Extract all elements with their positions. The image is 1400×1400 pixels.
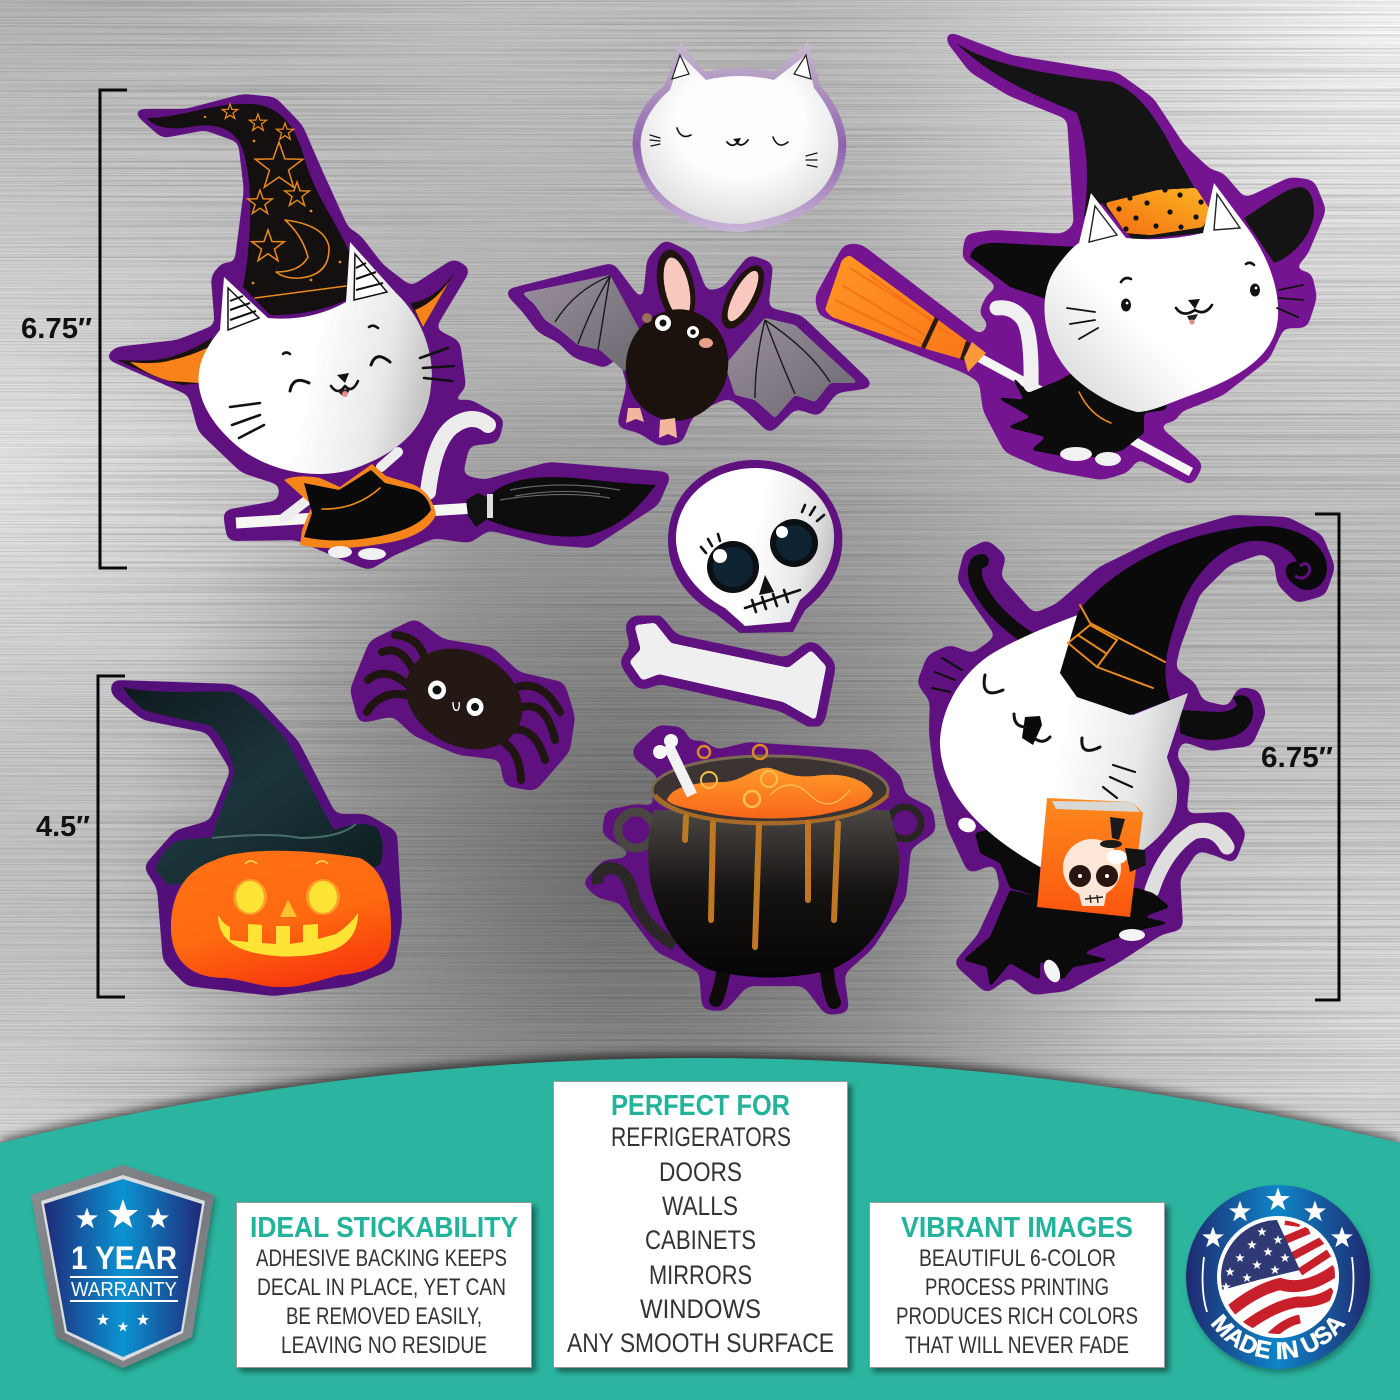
sticker: pumpkin with witch hat xyxy=(114,683,399,993)
teal footer panel xyxy=(0,1053,1400,1400)
info card: perfect for: ANY SMOOTH SURFACE xyxy=(567,1328,834,1358)
spider body xyxy=(388,629,540,769)
dimension bracket: right cat xyxy=(1315,514,1339,1000)
dress xyxy=(996,370,1168,457)
hat brims xyxy=(970,187,1314,300)
dimension label 4.5: 4.5″ xyxy=(36,811,90,843)
ears xyxy=(1089,194,1240,242)
cat head xyxy=(940,615,1188,867)
badge text: MADE IN USA xyxy=(1210,1314,1346,1360)
tail xyxy=(428,419,488,492)
bat wings xyxy=(522,275,858,418)
smiling face xyxy=(1067,263,1303,339)
info card: perfect for: WALLS xyxy=(662,1191,738,1221)
dress and arms xyxy=(284,452,436,560)
cat head xyxy=(1044,183,1278,412)
cauldron handles and tail xyxy=(598,807,921,945)
warranty text: WARRANTY xyxy=(71,1279,177,1301)
info card: vibrant images: THAT WILL NEVER FADE xyxy=(905,1332,1129,1359)
info card: ideal stickability: IDEAL STICKABILITY xyxy=(250,1212,518,1244)
sticker: skull xyxy=(668,460,842,633)
cauldron rim xyxy=(652,756,888,824)
skull face xyxy=(701,505,824,612)
sticker: sleeping moon cat face xyxy=(633,42,846,232)
ears xyxy=(228,254,387,330)
info card: perfect for: REFRIGERATORS xyxy=(611,1122,791,1152)
bat body and face xyxy=(615,300,739,438)
jack-o-lantern face xyxy=(218,861,358,957)
sticker: cauldron xyxy=(586,728,933,1012)
bubbling details xyxy=(698,745,850,807)
info card: vibrant images: BEAUTIFUL 6-COLOR xyxy=(919,1245,1116,1272)
info card: vibrant images: PRODUCES RICH COLORS xyxy=(896,1303,1138,1330)
sticker: witch cat reading skull book xyxy=(920,518,1332,992)
dimension bracket: pumpkin xyxy=(98,676,125,997)
sticker: witch cat with polka-dot hat on orange broom xyxy=(818,35,1323,482)
info card: perfect for: WINDOWS xyxy=(640,1294,761,1324)
witch hat with belt xyxy=(1060,526,1327,715)
teal hat xyxy=(123,687,383,885)
info card: ideal stickability: ADHESIVE BACKING KEEPS xyxy=(256,1245,507,1272)
info card: ideal stickability: DECAL IN PLACE, YET CAN xyxy=(257,1274,506,1301)
info card: perfect for: DOORS xyxy=(659,1157,742,1187)
tail xyxy=(997,308,1031,385)
warranty text: 1 YEAR xyxy=(71,1240,177,1276)
warranty text xyxy=(70,1240,178,1302)
spider face xyxy=(428,680,484,716)
pumpkin body xyxy=(171,851,391,987)
info card: vibrant images: VIBRANT IMAGES xyxy=(901,1212,1133,1244)
sleeve and skirt xyxy=(956,815,1170,987)
broom xyxy=(236,477,656,537)
info card: perfect for: CABINETS xyxy=(645,1225,756,1255)
dimension label 6.75 left: 6.75″ xyxy=(21,313,92,345)
sticker: bone xyxy=(632,625,824,717)
bat ears xyxy=(650,246,773,335)
cauldron legs xyxy=(716,965,834,1002)
dimension bracket: top-left cat xyxy=(100,90,127,568)
sticker: bat xyxy=(508,243,870,443)
info card: perfect for: PERFECT FOR xyxy=(611,1090,790,1122)
hat xyxy=(956,43,1210,240)
hat brim curls xyxy=(975,561,1253,740)
info card: perfect for xyxy=(554,1082,852,1372)
info card: ideal stickability xyxy=(236,1202,536,1372)
badge stars xyxy=(1202,1188,1353,1247)
broom xyxy=(825,255,1191,472)
warranty shield badge xyxy=(31,1165,216,1372)
cat head xyxy=(198,242,432,474)
skull book xyxy=(1037,798,1146,917)
info card: vibrant images: PROCESS PRINTING xyxy=(925,1274,1109,1301)
happy face xyxy=(230,326,454,438)
tail xyxy=(1152,830,1227,890)
dimension label 6.75 right: 6.75″ xyxy=(1261,742,1333,774)
sticker: witch cat with starry hat on black broom xyxy=(109,97,668,567)
info card: ideal stickability: LEAVING NO RESIDUE xyxy=(281,1332,487,1359)
sleeping face xyxy=(932,658,1135,798)
sticker: spider xyxy=(353,622,572,788)
info card: perfect for: MIRRORS xyxy=(649,1260,752,1290)
orange drips xyxy=(685,817,838,947)
feet xyxy=(1060,392,1121,466)
warranty stars xyxy=(76,1199,169,1331)
bone in cauldron xyxy=(653,734,692,795)
info card: vibrant images xyxy=(870,1202,1169,1372)
flag xyxy=(1221,1220,1335,1334)
moon cat face xyxy=(650,128,817,167)
info card: ideal stickability: BE REMOVED EASILY, xyxy=(286,1303,482,1330)
cauldron body xyxy=(648,810,899,978)
starry hat xyxy=(147,104,350,315)
made in usa badge xyxy=(1185,1185,1375,1376)
spider legs xyxy=(367,635,560,780)
hat brims xyxy=(117,272,455,385)
